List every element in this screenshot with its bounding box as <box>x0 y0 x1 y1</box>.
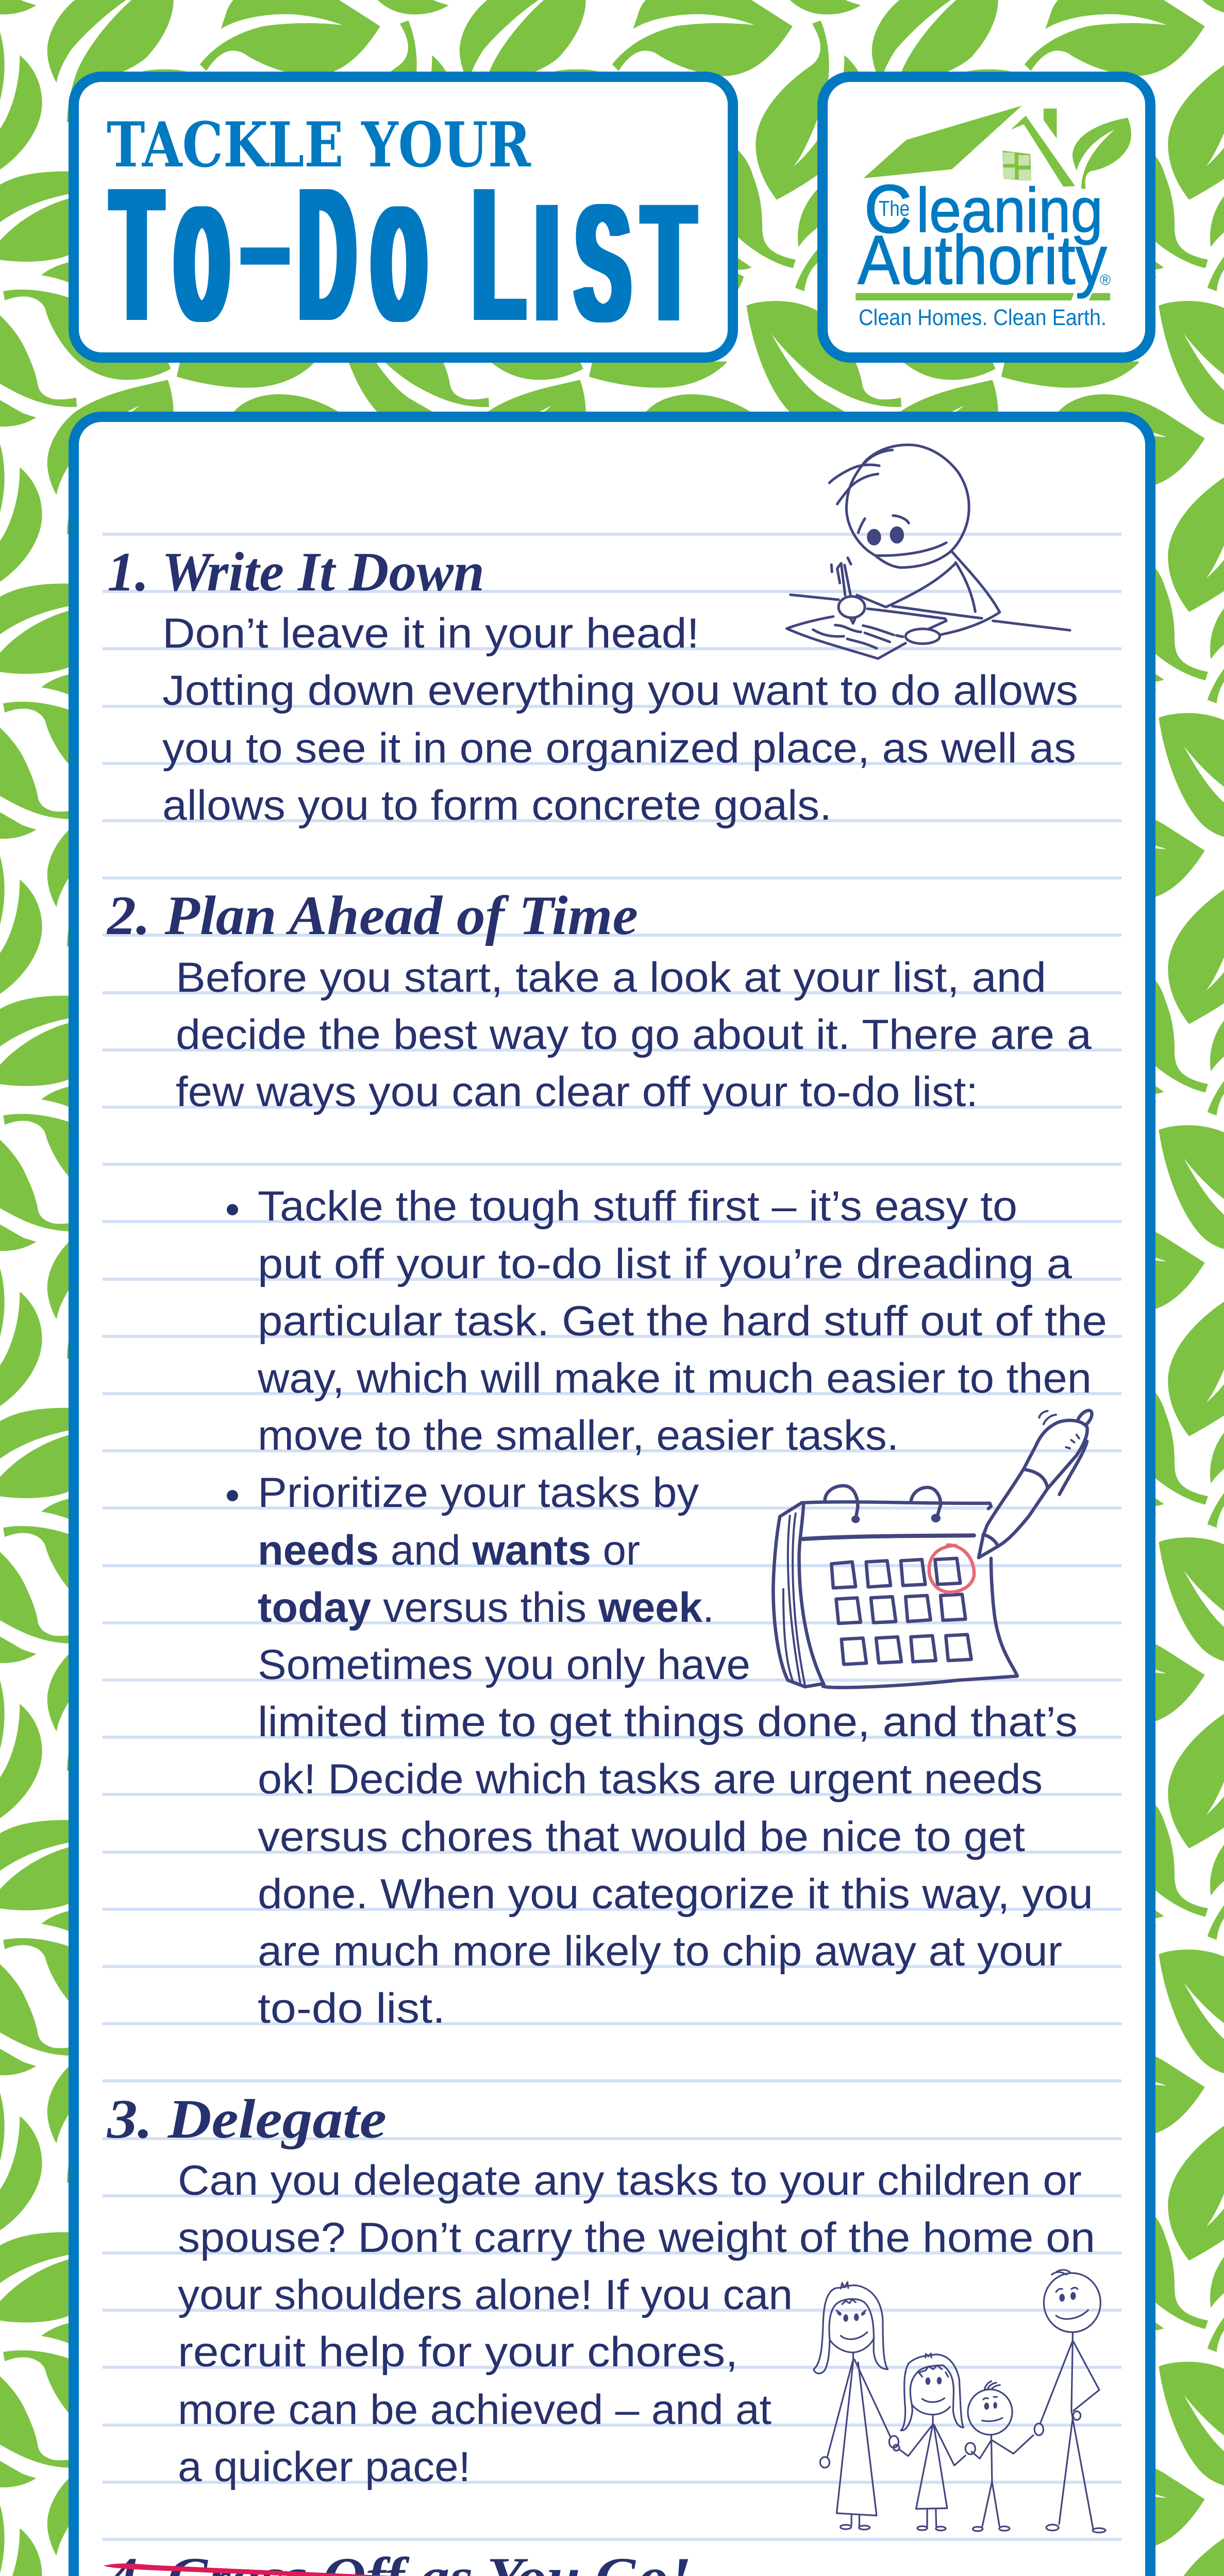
bullet: prioritize your tasks: versus chores that would be nice to get <box>258 1814 1025 1860</box>
heading: To-Do List: T <box>643 170 695 358</box>
text block: step 3 body <box>178 2157 1095 2490</box>
heading: To-Do List: o <box>174 130 229 366</box>
text block: step 3 body: your shoulders alone! If you can <box>178 2272 793 2318</box>
heading: To-Do List: D <box>298 149 356 362</box>
bullet: prioritize your tasks: Sometimes you only have <box>258 1641 750 1688</box>
text block: step 2 intro: decide the best way to go about it. There are a <box>176 1011 1092 1058</box>
heading: To-Do List: L <box>472 149 525 362</box>
logo wordmark: The Cleaning Authority: ® <box>1100 272 1111 289</box>
bullet: prioritize your tasks: needs and wants or <box>258 1527 640 1574</box>
text block: step 3 body: more can be achieved – and at <box>178 2386 772 2433</box>
logo tagline: Clean Homes. Clean Earth. <box>859 305 1106 330</box>
logo wordmark: The Cleaning Authority: C <box>864 171 912 247</box>
heading: step 2: 2. Plan Ahead of Time <box>106 885 638 946</box>
text block: step 3 body: a quicker pace! <box>178 2444 471 2490</box>
heading: step 3: 3. Delegate <box>107 2089 387 2150</box>
text block: step 1 body: Jotting down everything you want to do allows <box>162 667 1078 714</box>
heading: step 1: 1. Write It Down <box>107 541 484 603</box>
logo green bar <box>856 293 1110 300</box>
panel: notebook content <box>74 417 1150 2576</box>
section 3 <box>107 2089 1105 2533</box>
icon: calendar and pen <box>773 1411 1092 1687</box>
logo wordmark: The Cleaning Authority <box>858 171 1111 299</box>
heading: To-Do List: - <box>238 164 292 325</box>
bullet: prioritize your tasks: today versus this week. <box>258 1584 714 1631</box>
bullet: tackle the tough stuff: way, which will make it much easier to then <box>257 1355 1092 1402</box>
bullet: prioritize your tasks: are much more likely to chip away at your <box>258 1928 1062 1975</box>
panel: logo <box>823 77 1150 358</box>
text block: step 3 body: recruit help for your chores, <box>178 2329 738 2376</box>
bullet: prioritize your tasks: to-do list. <box>258 1985 445 2032</box>
bullet: tackle the tough stuff: move to the smaller, easier tasks. <box>258 1412 899 1459</box>
text block: step 2 intro: few ways you can clear off your to-do list: <box>176 1069 978 1115</box>
bullet: prioritize your tasks: done. When you categorize it this way, you <box>258 1871 1093 1918</box>
notebook ruled lines <box>102 533 1122 2576</box>
icon: stick figure family <box>814 2270 1105 2533</box>
heading: To-Do List: I <box>534 170 560 358</box>
text block: step 1 body: Don’t leave it in your head! <box>162 610 699 657</box>
section 2 <box>106 885 1107 2032</box>
bullet: prioritize your tasks: ok! Decide which tasks are urgent needs <box>258 1756 1043 1803</box>
bullet: tackle the tough stuff: particular task. Get the hard stuff out of the <box>258 1298 1107 1345</box>
heading: To-Do List: S <box>575 170 631 358</box>
icon: stick figure writing at desk <box>787 445 1070 658</box>
section 1 <box>107 445 1078 829</box>
bullet: prioritize your tasks <box>227 1469 1093 2032</box>
text block: step 3 body: spouse? Don’t carry the weight of the home on <box>178 2214 1095 2261</box>
red strike-through on heading <box>104 2564 726 2576</box>
heading: To-Do List: T <box>111 149 162 362</box>
text block: step 2 intro <box>176 954 1092 1115</box>
text block: step 1 body: you to see it in one organized place, as well as <box>162 725 1076 772</box>
section 4 <box>104 2547 1101 2576</box>
logo wordmark: The Cleaning Authority: The <box>879 196 910 221</box>
heading: To-Do List: o <box>371 130 427 366</box>
bullet: prioritize your tasks: Prioritize your tasks by <box>258 1469 699 1516</box>
text block: step 2 intro: Before you start, take a look at your list, and <box>176 954 1046 1001</box>
heading: To-Do List <box>111 130 695 366</box>
text block: step 3 body: Can you delegate any tasks to your children or <box>178 2157 1082 2204</box>
logo wordmark: The Cleaning Authority: leaning <box>916 175 1103 245</box>
panel: title <box>74 77 733 366</box>
text block: step 1 body: allows you to form concrete goals. <box>162 782 832 829</box>
logo wordmark: The Cleaning Authority: Authority <box>858 221 1107 299</box>
bullet: tackle the tough stuff: Tackle the tough stuff first – it’s easy to <box>258 1183 1017 1230</box>
bullet: tackle the tough stuff <box>227 1183 1107 1459</box>
text block: step 1 body <box>162 610 1078 829</box>
bullet: prioritize your tasks: limited time to get things done, and that’s <box>258 1699 1078 1745</box>
bullet: tackle the tough stuff: put off your to-do list if you’re dreading a <box>258 1241 1072 1287</box>
heading: Tackle Your: TACKLE YOUR <box>107 109 531 181</box>
icon: house and leaf logo mark <box>864 106 1131 189</box>
